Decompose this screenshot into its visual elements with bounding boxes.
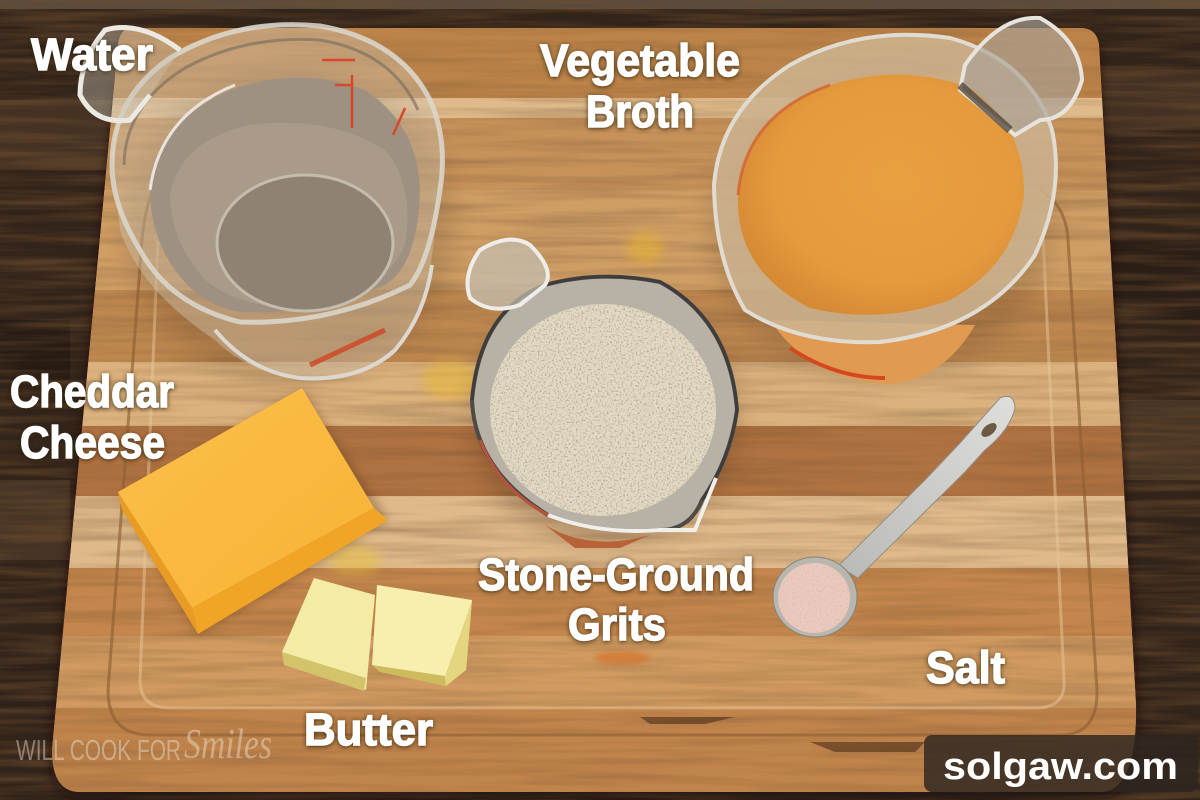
water surface (150, 78, 420, 312)
photographer watermark: WILL COOK FOR (16, 735, 181, 767)
two pats of butter (282, 578, 472, 691)
glass measuring cup: water (80, 24, 455, 380)
glass measuring cup: vegetable broth (710, 18, 1082, 384)
label: Vegetable Broth (540, 35, 740, 137)
site watermark badge (924, 735, 1198, 792)
label: Vegetable Broth: Broth (586, 86, 694, 137)
label: Stone-Ground Grits: Stone-Ground (478, 549, 754, 600)
block of cheddar cheese (118, 388, 388, 636)
juice groove (108, 190, 1097, 735)
turmeric stains (422, 360, 478, 400)
broth surface (738, 75, 1024, 315)
photographer watermark (16, 722, 272, 768)
label: Cheddar Cheese: Cheddar (10, 366, 174, 417)
label: Cheddar Cheese: Cheese (20, 417, 165, 468)
handle (468, 240, 548, 309)
cup base with markings (215, 265, 432, 378)
glass bowl: stone-ground grits (468, 240, 737, 548)
measuring spoon with salt (773, 396, 1015, 637)
label: Butter: Butter (304, 704, 433, 755)
handle (80, 28, 180, 121)
photographer watermark: Smiles (184, 722, 272, 768)
label: Salt: Salt (926, 642, 1005, 693)
label: Vegetable Broth: Vegetable (540, 35, 740, 86)
site watermark badge: solgaw.com (943, 746, 1178, 788)
handle (960, 18, 1082, 135)
label: Stone-Ground Grits (478, 549, 754, 650)
label: Cheddar Cheese (10, 366, 174, 468)
label: Stone-Ground Grits: Grits (568, 599, 666, 650)
label: Water: Water (31, 29, 153, 80)
cup rim (112, 25, 442, 322)
